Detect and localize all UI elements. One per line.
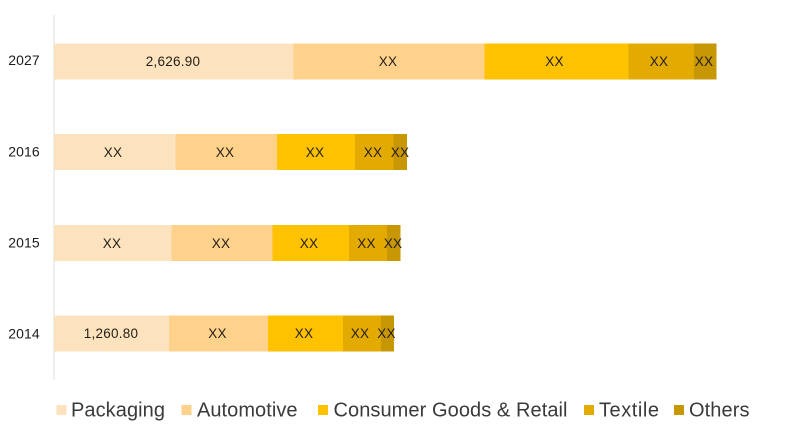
bar: 2016: 2016 bbox=[8, 144, 40, 160]
bar: 2027 bbox=[8, 44, 716, 80]
bar: 2015: XX bbox=[212, 236, 230, 251]
bar: 2027: XX bbox=[695, 54, 713, 69]
bar: 2016: XX bbox=[216, 145, 234, 160]
vertical axis line bbox=[54, 15, 55, 380]
bar: 2015: 2015 bbox=[8, 234, 40, 250]
bar: 2016: XX bbox=[391, 145, 409, 160]
bar: 2015: XX bbox=[357, 236, 376, 251]
legend item: Consumer Goods & Retail: Consumer Goods & Retail bbox=[334, 400, 568, 422]
bar: 2016: XX bbox=[306, 145, 324, 160]
bar: 2014 bbox=[8, 316, 396, 352]
bar: 2027: 2,626.90 bbox=[146, 54, 200, 69]
legend item: Others: Others bbox=[689, 400, 750, 422]
bar: 2016: XX bbox=[104, 145, 122, 160]
bar: 2014: XX bbox=[351, 326, 369, 341]
bar: 2016 bbox=[8, 134, 409, 170]
bar: 2015: XX bbox=[103, 236, 121, 251]
bar: 2014: XX bbox=[295, 326, 313, 341]
bar: 2027: XX bbox=[650, 54, 668, 69]
legend item: Textile: Textile bbox=[599, 400, 659, 422]
bar: 2014: 2014 bbox=[8, 326, 40, 342]
bar: 2015 bbox=[8, 225, 402, 261]
bar: 2016: XX bbox=[364, 145, 382, 160]
bar: 2027: 2027 bbox=[8, 52, 40, 68]
bar: 2014: 1,260.80 bbox=[84, 326, 138, 341]
bar: 2014: XX bbox=[377, 326, 396, 341]
bar: 2027: XX bbox=[379, 54, 397, 69]
bar: 2014: XX bbox=[208, 326, 227, 341]
legend item: Packaging: Packaging bbox=[71, 400, 165, 422]
bar: 2015: XX bbox=[300, 236, 318, 251]
bar: 2015: XX bbox=[384, 236, 402, 251]
legend bbox=[56, 400, 750, 422]
legend item: Automotive: Automotive bbox=[197, 400, 298, 422]
bar: 2027: XX bbox=[545, 54, 564, 69]
